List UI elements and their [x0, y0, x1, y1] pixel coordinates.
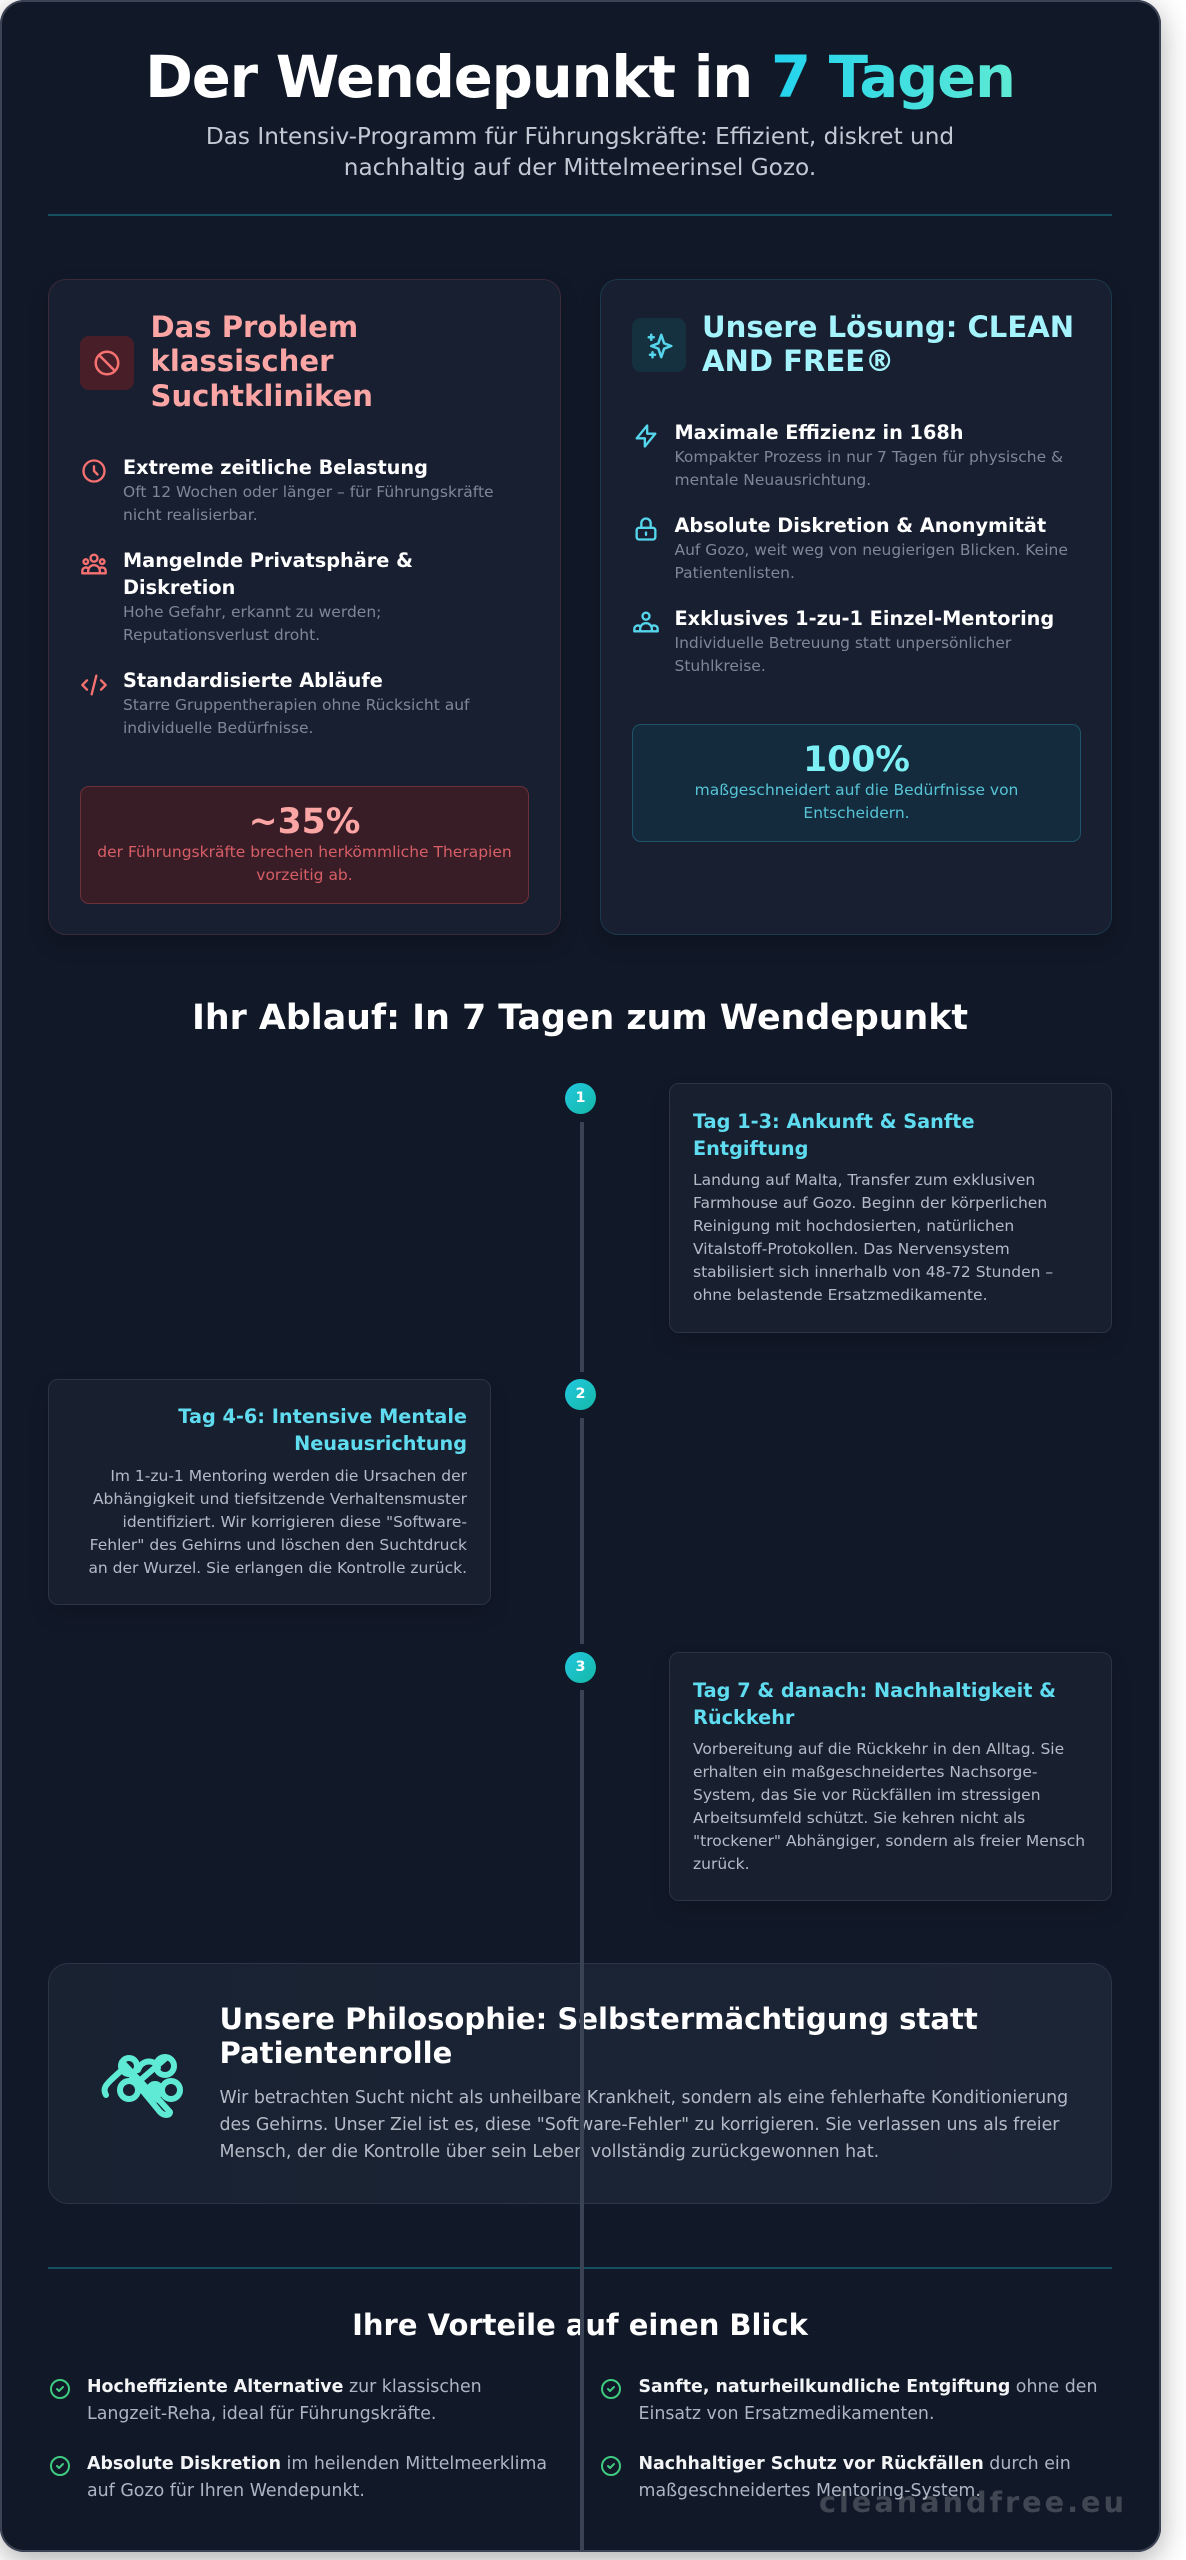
- stat: 35 percent: der Führungskräfte brechen herkömmliche Therapien: [97, 843, 512, 861]
- problem item: time burden: [123, 456, 494, 524]
- timeline marker 3: 3: [575, 1659, 586, 1675]
- subtitle: nachhaltig auf der Mittelmeerinsel Gozo.: [344, 154, 816, 181]
- benefit 3: Sanfte, naturheilkundliche Entgiftung ohne den: [638, 2377, 1097, 2397]
- step 2 text: an der Wurzel. Sie erlangen die Kontrolle zurück.: [88, 1559, 467, 1577]
- solution heading: Unsere Lösung: CLEAN: [702, 310, 1074, 344]
- icon: code: [81, 674, 107, 696]
- benefit 4: Nachhaltiger Schutz vor Rückfällen durch ein: [638, 2454, 1071, 2474]
- problem item: privacy: [123, 549, 413, 644]
- icon: brain: [102, 2054, 183, 2118]
- stat: 100 percent: 100%: [803, 740, 910, 780]
- timeline line 1: [580, 1122, 584, 1372]
- step 3 text: Vorbereitung auf die Rückkehr in den Alltag. Sie: [693, 1740, 1064, 1758]
- problem item: privacy: Diskretion: [123, 576, 235, 599]
- problem item: time burden: Oft 12 Wochen oder länger – für Führungskräfte: [123, 483, 494, 501]
- step 3 text: [693, 1740, 1085, 1873]
- step 1 text: Farmhouse auf Gozo. Beginn der körperlichen: [693, 1194, 1047, 1212]
- icon: sparkle box: [632, 318, 686, 372]
- icon: check 2: [50, 2456, 70, 2476]
- stat: 35 percent: vorzeitig ab.: [256, 866, 353, 884]
- timeline marker 2: 2: [575, 1386, 586, 1402]
- stat: 100 percent: [632, 724, 1081, 842]
- step 1 title: [693, 1110, 975, 1160]
- step 1 text: ohne belastende Ersatzmedikamente.: [693, 1286, 988, 1304]
- icon: check 4: [601, 2456, 621, 2476]
- solution item: discretion: [674, 514, 1068, 582]
- problem item: time burden: Extreme zeitliche Belastung: [123, 456, 428, 479]
- timeline line 3: [580, 1690, 584, 2552]
- step 1 text: Reinigung mit hochdosierten, natürlichen: [693, 1217, 1014, 1235]
- problem item: privacy: Hohe Gefahr, erkannt zu werden;: [123, 603, 381, 621]
- solution heading: AND FREE®: [702, 344, 894, 378]
- philosophy heading: Patientenrolle: [220, 2036, 452, 2070]
- icon: mentor: [633, 612, 659, 632]
- problem heading: klassischer: [150, 344, 333, 378]
- step 1 title: Tag 1-3: Ankunft & Sanfte: [693, 1110, 975, 1133]
- step 2 text: identifiziert. Wir korrigieren diese "Software-: [123, 1513, 467, 1531]
- solution item: mentoring: Stuhlkreise.: [674, 657, 766, 675]
- philosophy text: Mensch, der die Kontrolle über sein Leben vollständig zurückgewonnen hat.: [220, 2142, 879, 2162]
- timeline marker 1: 1: [575, 1090, 586, 1106]
- timeline step 3 card: [669, 1652, 1112, 1901]
- problem heading: Suchtkliniken: [150, 379, 373, 413]
- step 1 text: Vitalstoff-Protokollen. Das Nervensystem: [693, 1240, 1010, 1258]
- step 1 text: [693, 1171, 1053, 1304]
- benefit 2: auf Gozo für Ihren Wendepunkt.: [87, 2481, 365, 2501]
- problem item: standardised: [123, 669, 470, 737]
- step 2 text: Abhängigkeit und tiefsitzende Verhaltensmuster: [93, 1490, 467, 1508]
- problem item: privacy: Mangelnde Privatsphäre &: [123, 549, 413, 572]
- solution item: discretion: Absolute Diskretion & Anonymität: [674, 514, 1046, 537]
- solution item: mentoring: [674, 607, 1054, 675]
- timeline step 1 card: [669, 1083, 1112, 1333]
- benefit 1: [87, 2377, 482, 2424]
- icon: group: [81, 554, 107, 574]
- benefit 2: [87, 2454, 547, 2501]
- timeline step 2 card: [48, 1379, 491, 1605]
- solution heading: [702, 310, 1074, 378]
- step 3 text: erhalten ein maßgeschneidertes Nachsorge-: [693, 1763, 1037, 1781]
- step 3 title: Rückkehr: [693, 1706, 794, 1729]
- philosophy heading: [220, 2002, 978, 2070]
- benefit 3: Einsatz von Ersatzmedikamenten.: [638, 2404, 934, 2424]
- title: Der Wendepunkt in 7 Tagen: [145, 44, 1015, 111]
- panel: problem: [48, 279, 561, 935]
- benefit 4: maßgeschneidertes Mentoring-System.: [638, 2481, 981, 2501]
- stat: 100 percent: maßgeschneidert auf die Bedürfnisse von: [695, 781, 1018, 799]
- problem heading: [150, 310, 373, 413]
- step 3 title: [693, 1679, 1056, 1729]
- icon: ban box: [80, 336, 134, 390]
- problem item: privacy: Reputationsverlust droht.: [123, 626, 320, 644]
- benefit 1: Hocheffiziente Alternative zur klassischen: [87, 2377, 482, 2397]
- icon: no symbol: [94, 350, 120, 376]
- subtitle: Das Intensiv-Programm für Führungskräfte: Effizient, diskret und: [206, 123, 954, 150]
- solution item: discretion: Auf Gozo, weit weg von neugierigen Blicken. Keine: [674, 541, 1068, 559]
- step 2 text: Im 1-zu-1 Mentoring werden die Ursachen der: [110, 1467, 467, 1485]
- step 1 title: Entgiftung: [693, 1137, 808, 1160]
- solution item: mentoring: Exklusives 1-zu-1 Einzel-Mentoring: [674, 607, 1054, 630]
- solution item: discretion: Patientenlisten.: [674, 564, 795, 582]
- subtitle: [206, 123, 954, 181]
- stat: 100 percent: Entscheidern.: [803, 804, 910, 822]
- icon: bolt: [635, 424, 656, 448]
- philosophy text: Wir betrachten Sucht nicht als unheilbare Krankheit, sondern als eine fehlerhafte Konditionierung: [220, 2088, 1068, 2108]
- benefit 2: Absolute Diskretion im heilenden Mittelmeerklima: [87, 2454, 547, 2474]
- step 3 title: Tag 7 & danach: Nachhaltigkeit &: [693, 1679, 1056, 1702]
- philosophy heading: Unsere Philosophie: Selbstermächtigung statt: [220, 2002, 978, 2036]
- benefit 4: [638, 2454, 1071, 2501]
- timeline heading: Ihr Ablauf: In 7 Tagen zum Wendepunkt: [192, 998, 968, 1038]
- solution item: efficiency: mentale Neuausrichtung.: [674, 471, 871, 489]
- step 2 title: Neuausrichtung: [294, 1432, 467, 1455]
- philosophy text: des Gehirns. Unser Ziel ist es, diese "Software-Fehler" zu korrigieren. Sie verlassen uns als freier: [220, 2115, 1059, 2135]
- step 2 text: [88, 1467, 467, 1577]
- timeline line 2: [580, 1418, 584, 1644]
- philosophy text: [220, 2088, 1068, 2162]
- step 2 title: [178, 1405, 467, 1455]
- solution item: efficiency: [674, 421, 1063, 489]
- step 1 text: Landung auf Malta, Transfer zum exklusiven: [693, 1171, 1035, 1189]
- step 3 text: zurück.: [693, 1855, 750, 1873]
- benefit 1: Langzeit-Reha, ideal für Führungskräfte.: [87, 2404, 436, 2424]
- timeline marker 3: [565, 1652, 596, 1683]
- step 2 text: Fehler" des Gehirns und löschen den Suchtdruck: [90, 1536, 467, 1554]
- icon: clock: [82, 459, 106, 483]
- stat: 35 percent: ~35%: [249, 802, 360, 842]
- problem item: standardised: individuelle Bedürfnisse.: [123, 719, 313, 737]
- problem item: time burden: nicht realisierbar.: [123, 506, 258, 524]
- solution item: efficiency: Maximale Effizienz in 168h: [674, 421, 964, 444]
- watermark: cleanandfree.eu: [819, 2485, 1127, 2519]
- step 3 text: System, das Sie vor Rückfällen im stressigen: [693, 1786, 1041, 1804]
- step 3 text: "trockener" Abhängiger, sondern als freier Mensch: [693, 1832, 1085, 1850]
- solution item: mentoring: Individuelle Betreuung statt unpersönlicher: [674, 634, 1011, 652]
- panel: solution: [600, 279, 1112, 935]
- icon: check 1: [50, 2379, 70, 2399]
- step 2 title: Tag 4-6: Intensive Mentale: [178, 1405, 467, 1428]
- step 1 text: stabilisiert sich innerhalb von 48-72 Stunden –: [693, 1263, 1053, 1281]
- timeline marker 1: [565, 1083, 596, 1114]
- solution item: efficiency: Kompakter Prozess in nur 7 Tagen für physische &: [674, 448, 1063, 466]
- icon: sparkles: [648, 334, 672, 358]
- benefit 3: [638, 2377, 1097, 2424]
- problem item: standardised: Standardisierte Abläufe: [123, 669, 383, 692]
- problem heading: Das Problem: [150, 310, 358, 344]
- icon: check 3: [601, 2379, 621, 2399]
- philosophy panel: [48, 1963, 1112, 2204]
- problem item: standardised: Starre Gruppentherapien ohne Rücksicht auf: [123, 696, 470, 714]
- benefits heading: Ihre Vorteile auf einen Blick: [352, 2308, 808, 2342]
- timeline marker 2: [565, 1379, 596, 1410]
- stat: 35 percent: [80, 786, 529, 904]
- icon: lock: [636, 517, 656, 541]
- step 3 text: Arbeitsumfeld schützt. Sie kehren nicht als: [693, 1809, 1025, 1827]
